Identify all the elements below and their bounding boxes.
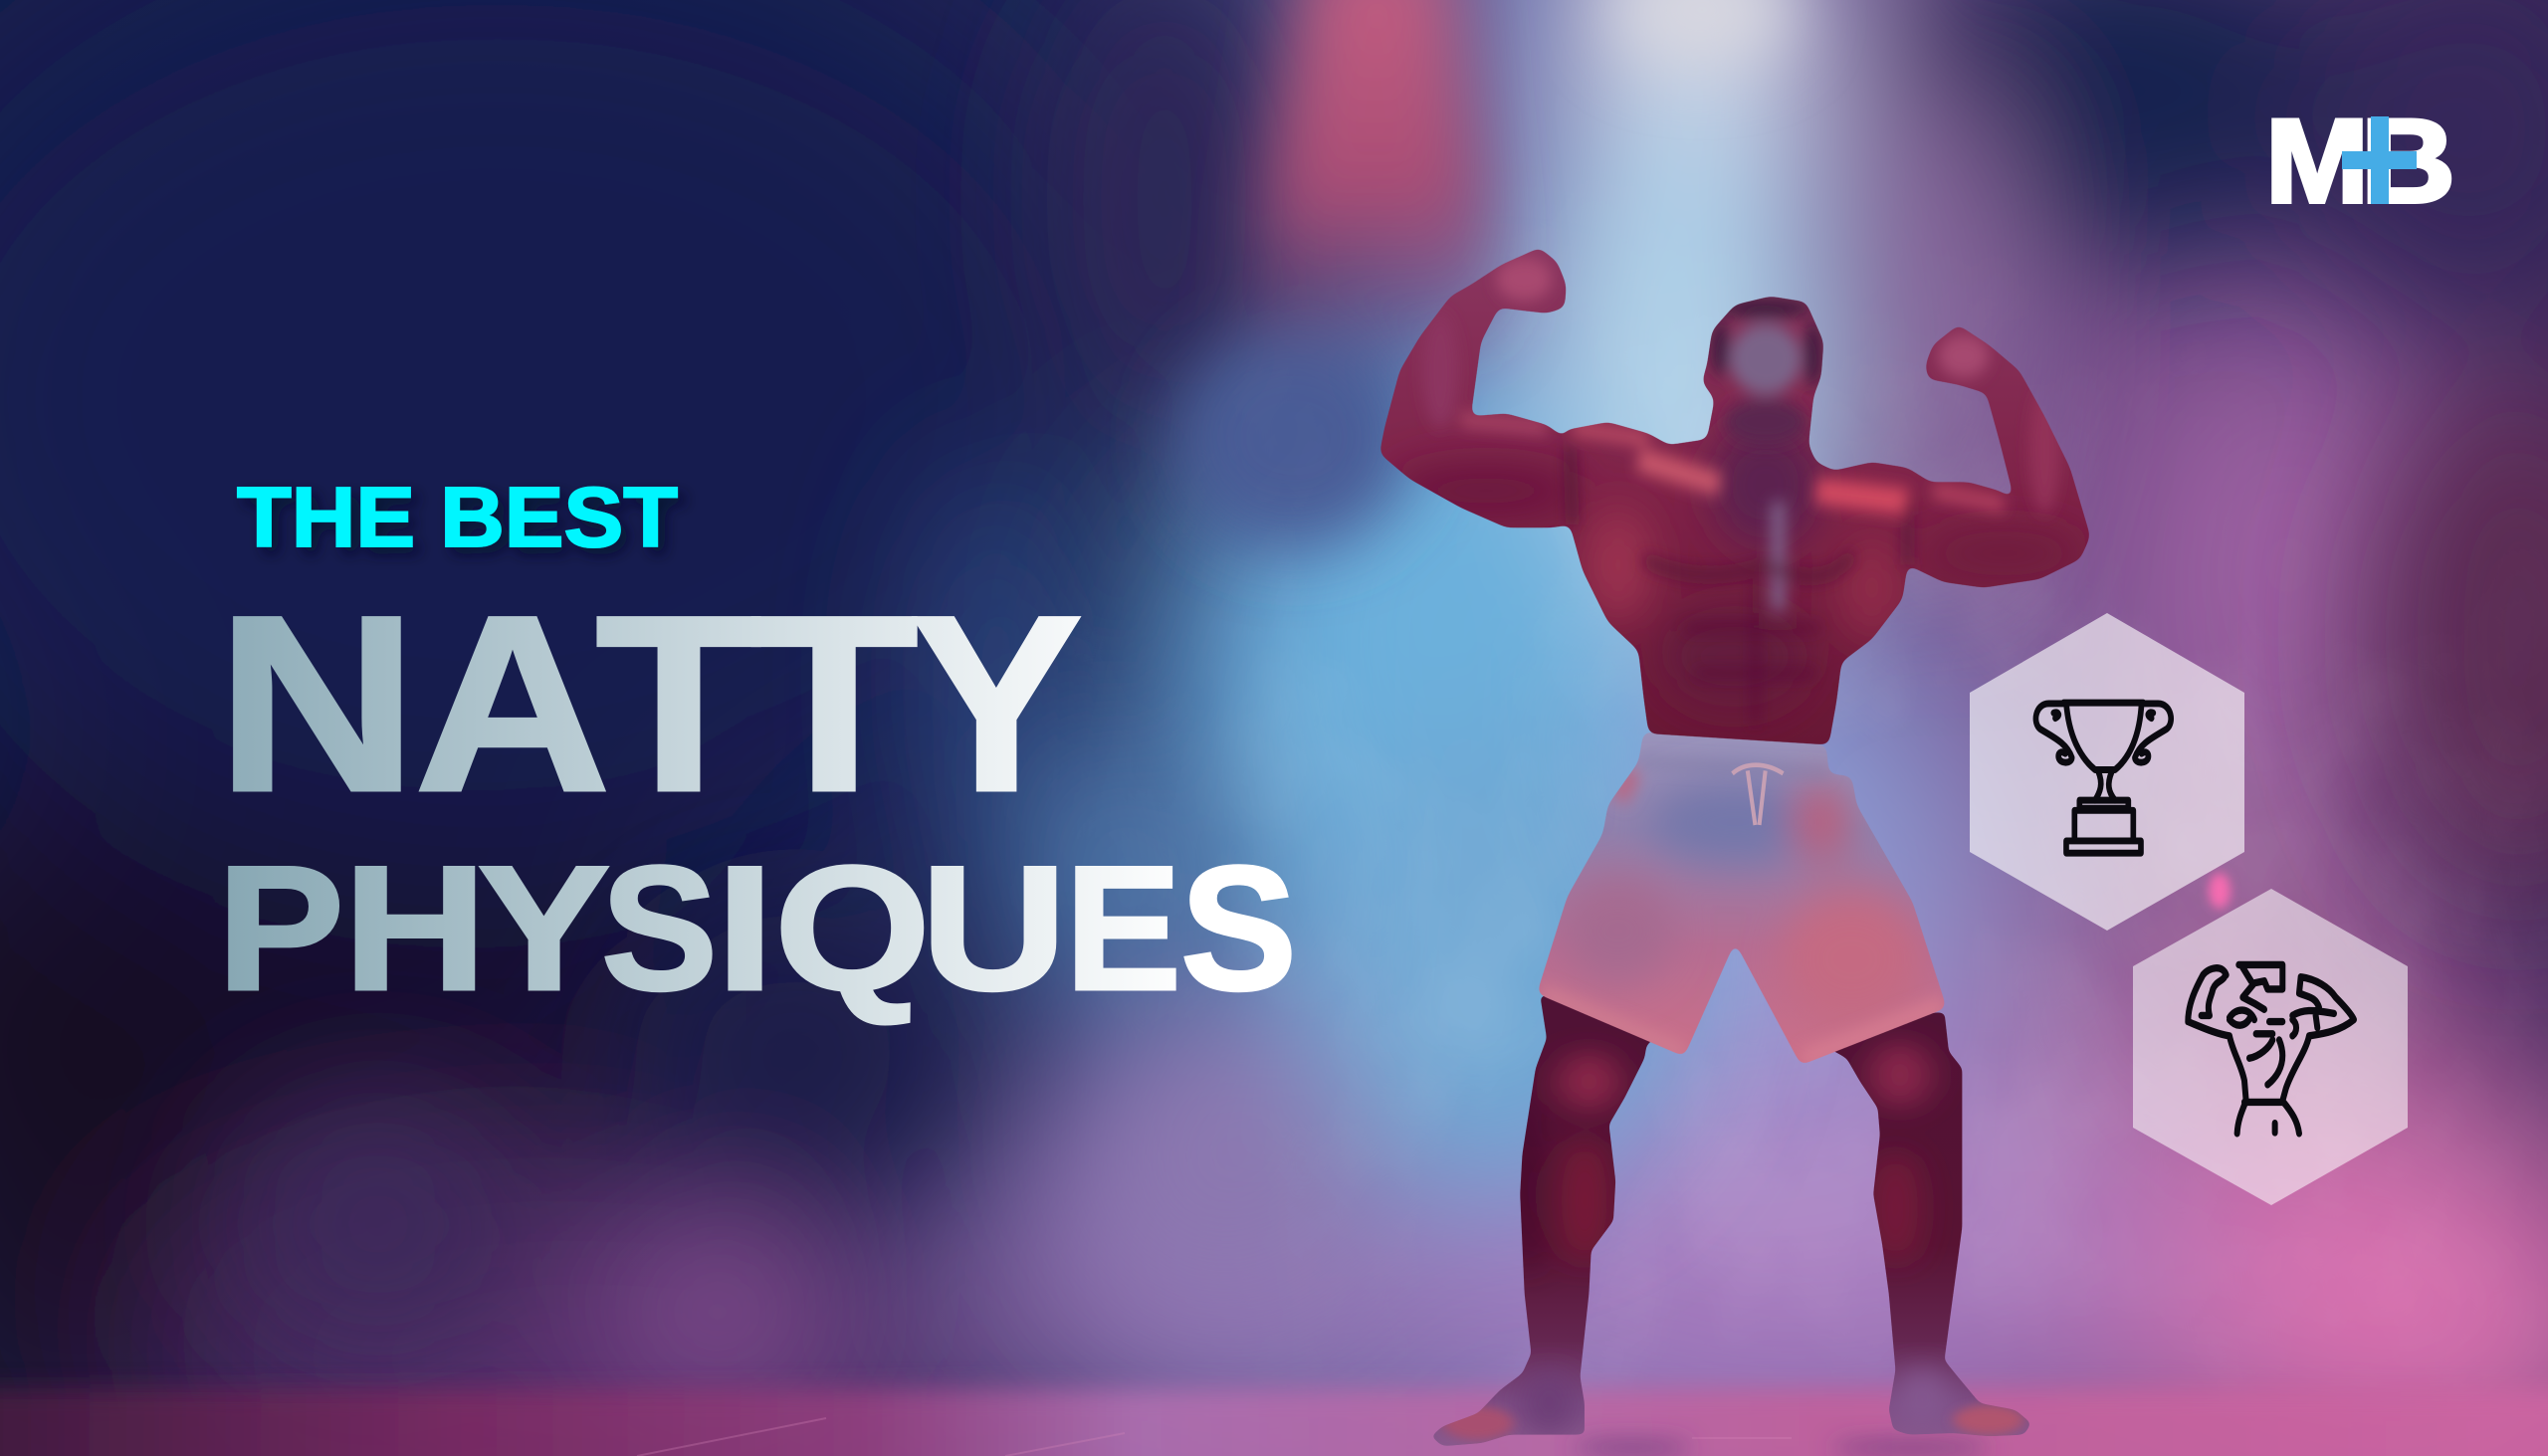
stage floor	[0, 1388, 2548, 1456]
heading: PHYSIQUES: I	[716, 829, 774, 1027]
hexagon badge: muscle	[2133, 889, 2408, 1205]
legs and feet	[1433, 996, 2029, 1446]
heading: NATTY	[216, 564, 1083, 844]
heading: PHYSIQUES: E	[1065, 829, 1181, 1027]
heading: NATTY: T	[595, 564, 762, 844]
heading: PHYSIQUES	[217, 829, 1297, 1027]
pink glow spot	[2209, 873, 2230, 909]
heading: PHYSIQUES: P	[217, 829, 344, 1027]
torso and arms	[1360, 228, 2111, 759]
heading: PHYSIQUES: Q	[774, 829, 931, 1027]
icon: trophy	[2035, 703, 2171, 853]
heading: PHYSIQUES: Y	[478, 829, 610, 1027]
heading: THE BEST: THE BEST	[237, 471, 678, 565]
logo: M+B: M	[2265, 95, 2369, 228]
heading: NATTY: Y	[910, 564, 1083, 844]
icon: flexing body	[2188, 964, 2354, 1134]
logo: M+B: B	[2361, 95, 2455, 228]
heading: PHYSIQUES: H	[343, 829, 487, 1027]
heading: NATTY: T	[749, 564, 919, 844]
hexagon badge: trophy	[1970, 613, 2244, 931]
heading: PHYSIQUES: U	[921, 829, 1067, 1027]
heading: PHYSIQUES: S	[601, 829, 718, 1027]
heading: PHYSIQUES: S	[1180, 829, 1297, 1027]
heading: NATTY: A	[414, 564, 611, 844]
shorts	[1539, 732, 1945, 1063]
logo: M+B	[2265, 95, 2455, 228]
heading: NATTY: N	[216, 564, 418, 844]
bodybuilder figure	[1360, 228, 2111, 1456]
